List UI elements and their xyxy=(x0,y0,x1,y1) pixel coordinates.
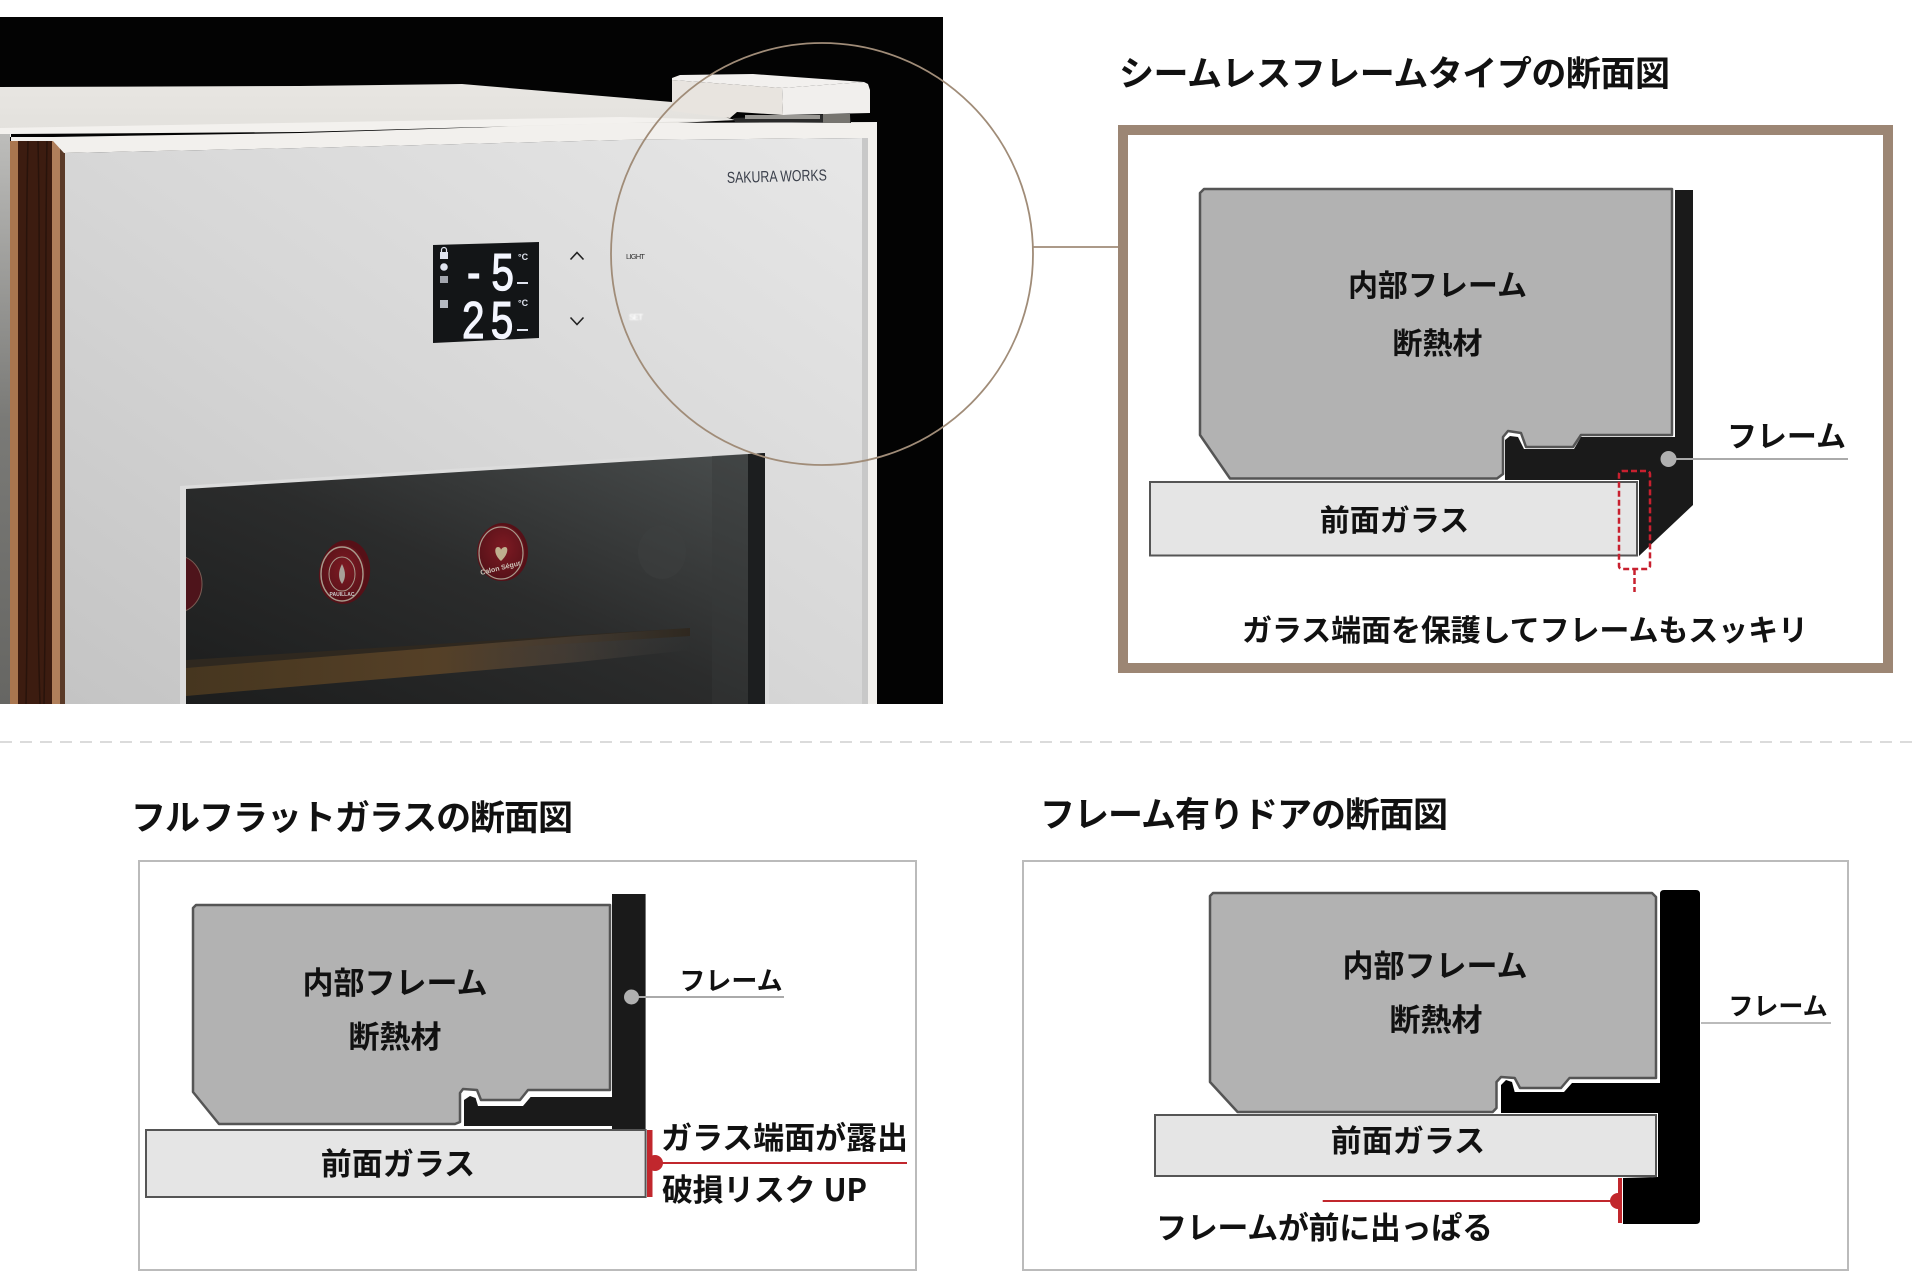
wood side panel xyxy=(10,141,65,704)
label: glass: 前面ガラス xyxy=(321,1147,475,1182)
wooden shelf xyxy=(186,628,690,696)
logo text: SAKURA WORKS xyxy=(727,167,827,187)
black frame xyxy=(1501,890,1700,1224)
degree labels: °C xyxy=(518,298,529,308)
heading: full flat glass: フルフラットガラスの断面図 xyxy=(131,799,573,838)
label: frame protrudes: フレームが前に出っぱる xyxy=(1156,1211,1493,1246)
callout connector line xyxy=(1033,246,1118,248)
top hinge xyxy=(672,74,870,123)
panel border xyxy=(139,861,916,1270)
caption: ガラス端面を保護してフレームもスッキリ xyxy=(1242,615,1808,648)
red dashed highlight xyxy=(1619,471,1650,592)
inner frame insulation xyxy=(1200,189,1672,478)
heading: seamless frame type: シームレスフレームタイプの断面図 xyxy=(1119,55,1670,94)
panel border xyxy=(1123,130,1888,668)
inner frame insulation xyxy=(193,905,610,1124)
bottle cap: faint reflection xyxy=(638,525,686,579)
label: glass: 前面ガラス xyxy=(1320,505,1469,538)
front glass xyxy=(146,1130,646,1197)
display small icons xyxy=(440,248,528,331)
temperature display xyxy=(433,242,539,349)
display digit readout: upper: -5 xyxy=(467,243,525,301)
red protrusion marker xyxy=(1323,1178,1622,1223)
wine window xyxy=(154,449,769,704)
icon: up chevron xyxy=(570,252,584,260)
bottle cap: Calon Segur xyxy=(477,523,528,581)
label: breakage risk: 破損リスク UP xyxy=(662,1165,867,1210)
SET label: SET xyxy=(629,313,643,322)
bottle cap left partial xyxy=(186,557,202,611)
degree labels: °C xyxy=(518,252,529,262)
label: insulation: 断熱材 xyxy=(1392,328,1482,361)
panel: seamless frame section xyxy=(1123,130,1888,668)
bottle cap: Lynch Bages xyxy=(318,540,370,604)
label: frame: フレーム xyxy=(679,966,783,996)
label: inner frame: 内部フレーム xyxy=(1342,949,1528,984)
red edge warning marker xyxy=(647,1130,907,1197)
bottle cap: Lynch Bages: PAUILLAC xyxy=(330,592,355,598)
zoom circle callout xyxy=(611,43,1033,465)
right door rim xyxy=(862,138,868,704)
label: frame: フレーム xyxy=(1728,993,1828,1021)
black frame xyxy=(1505,190,1693,556)
front glass xyxy=(1155,1115,1656,1176)
panel: framed door section xyxy=(1023,861,1848,1270)
LIGHT label: LIGHT xyxy=(626,252,645,261)
door left gray edge xyxy=(0,134,10,704)
panel border xyxy=(1023,861,1848,1270)
label: inner frame: 内部フレーム xyxy=(1348,270,1527,303)
cooler top surface xyxy=(0,84,735,130)
dashed divider xyxy=(0,741,1920,743)
label: glass: 前面ガラス xyxy=(1331,1124,1485,1159)
inner frame insulation xyxy=(1210,893,1656,1112)
heading: framed door: フレーム有りドアの断面図 xyxy=(1040,796,1448,835)
photo: wine cooler door close-up xyxy=(0,17,943,704)
label: frame: フレーム xyxy=(1727,421,1846,454)
label: inner frame: 内部フレーム xyxy=(302,966,488,1001)
window contents xyxy=(154,523,690,696)
panel: full flat glass section xyxy=(139,861,916,1270)
door top strip xyxy=(11,122,877,704)
frame pointer xyxy=(624,990,784,1004)
degree labels xyxy=(518,254,528,306)
display digit readout: lower: 25 xyxy=(462,291,520,349)
label: insulation: 断熱材 xyxy=(1390,1003,1482,1038)
front glass xyxy=(1150,482,1637,556)
bottle cap: Calon Segur: Calon Ségur xyxy=(480,560,522,577)
label: exposed edge: ガラス端面が露出 xyxy=(661,1121,908,1156)
label: insulation: 断熱材 xyxy=(348,1020,442,1055)
frame pointer line xyxy=(1701,1022,1831,1024)
frame pointer xyxy=(1660,451,1848,467)
door glass panel xyxy=(65,138,862,704)
black frame xyxy=(464,894,646,1130)
top seam line xyxy=(0,117,735,137)
icon: down chevron xyxy=(570,318,584,324)
